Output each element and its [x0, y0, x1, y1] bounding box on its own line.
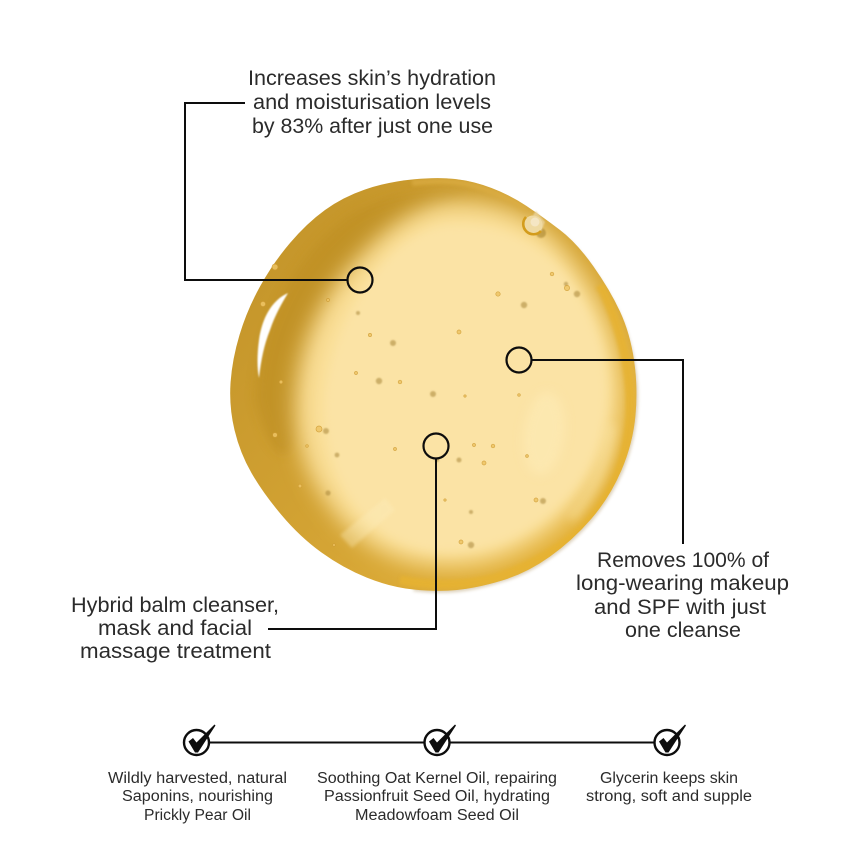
- outer rim highlight: [412, 181, 526, 209]
- pale centre: [296, 201, 621, 566]
- text block: glycerin: strong, soft and supple: [586, 788, 752, 805]
- oil droplet: [220, 170, 650, 600]
- connector and marker: [532, 360, 683, 544]
- callout text: Removes 100% of: [597, 549, 769, 572]
- callout: hybrid balm: [71, 434, 448, 663]
- text block: oils: Soothing Oat Kernel Oil, repairing: [317, 770, 557, 787]
- text block: glycerin: Glycerin keeps skin: [600, 770, 738, 787]
- text block: oils: Passionfruit Seed Oil, hydrating: [324, 788, 550, 805]
- connector and marker: [185, 103, 347, 280]
- callout: makeup removal: [506, 348, 789, 642]
- callout: hydration: and moisturisation levels: [253, 91, 491, 114]
- pale centre core: [325, 225, 606, 551]
- timeline connector: [210, 742, 654, 744]
- text block: saponins: Wildly harvested, natural: [108, 770, 287, 787]
- text block: saponins: Prickly Pear Oil: [144, 807, 251, 824]
- callout: makeup removal: long-wearing makeup: [576, 572, 789, 595]
- callout: hybrid balm: massage treatment: [80, 640, 271, 663]
- lower right glow: [571, 425, 612, 519]
- large bubble: [523, 210, 546, 238]
- callout: hydration: by 83% after just one use: [252, 115, 493, 138]
- callout: hydration: [185, 67, 496, 292]
- callout text: Increases skin’s hydration: [248, 67, 496, 90]
- text block: oils: Meadowfoam Seed Oil: [355, 807, 519, 824]
- fine bubbles: [260, 264, 570, 546]
- specular highlight: [258, 293, 288, 378]
- droplet body: [220, 170, 650, 600]
- icon: check 3: [654, 724, 686, 755]
- text block: saponins: [108, 770, 287, 824]
- soft light patches: [340, 504, 390, 548]
- callout: makeup removal: one cleanse: [625, 619, 741, 642]
- text block: oils: [317, 770, 557, 824]
- text block: saponins: Saponins, nourishing: [122, 788, 273, 805]
- callout: hybrid balm: mask and facial: [98, 617, 252, 640]
- dark specks: [323, 282, 580, 548]
- darker band upper left: [260, 198, 414, 448]
- callout: makeup removal: and SPF with just: [594, 596, 766, 619]
- droplet soft shadow: [413, 232, 638, 593]
- connector and marker: [268, 459, 436, 629]
- icon: check 1: [184, 724, 216, 755]
- icon: check 2: [424, 724, 456, 755]
- right rim gold: [400, 285, 630, 584]
- callout text: Hybrid balm cleanser,: [71, 594, 279, 617]
- text block: glycerin: [586, 770, 752, 805]
